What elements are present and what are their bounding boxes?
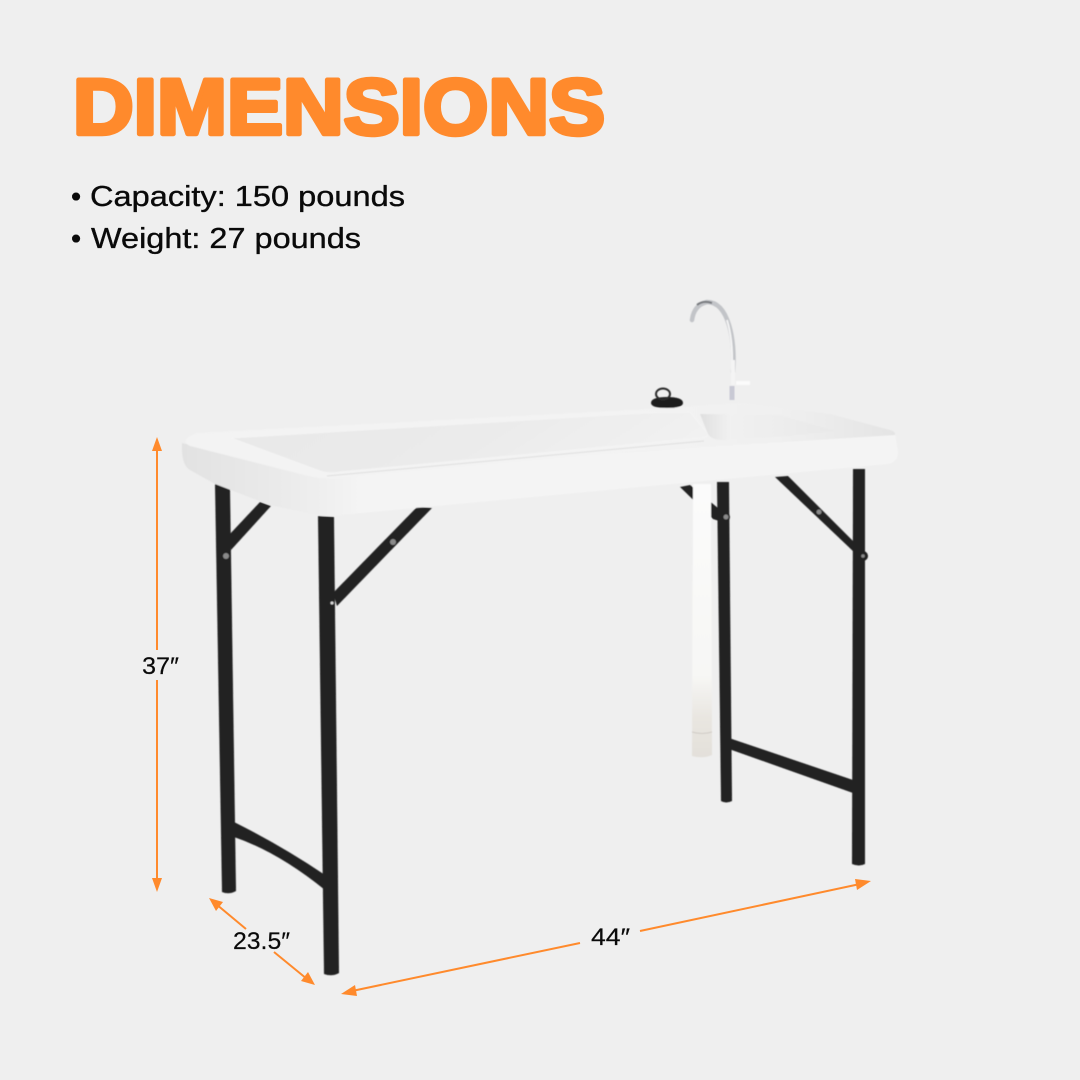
rear leg bolts (724, 510, 865, 558)
capacity bullet: • (71, 181, 81, 213)
table top (182, 403, 898, 516)
cutting board (231, 412, 708, 473)
drain hose (692, 484, 712, 757)
capacity bullet: Capacity: 150 pounds (90, 181, 405, 213)
front leg bolts (223, 539, 396, 604)
board front rim (327, 441, 704, 476)
weight bullet: Weight: 27 pounds (91, 223, 361, 255)
title: DIMENSIONS (73, 62, 605, 151)
dimension: height 37 inches: 37″ (142, 653, 180, 680)
drain stopper (651, 388, 683, 408)
sink basin (700, 414, 835, 440)
table top surface (185, 403, 895, 478)
dimension: depth 23.5 inches (209, 898, 315, 985)
spec list (71, 181, 405, 255)
rear braces behind hose (680, 485, 724, 522)
dimension: depth 23.5 inches: 23.5″ (233, 928, 291, 955)
dimension: width 44 inches (341, 879, 871, 996)
front-left legs and braces (215, 484, 432, 975)
dimension: width 44 inches: 44″ (591, 924, 631, 951)
faucet (692, 302, 750, 400)
table edge band (182, 433, 898, 516)
dimension: height 37 inches (142, 437, 180, 892)
rear legs and braces (717, 469, 868, 866)
product: folding table with sink (182, 302, 898, 975)
weight bullet: • (71, 223, 81, 255)
